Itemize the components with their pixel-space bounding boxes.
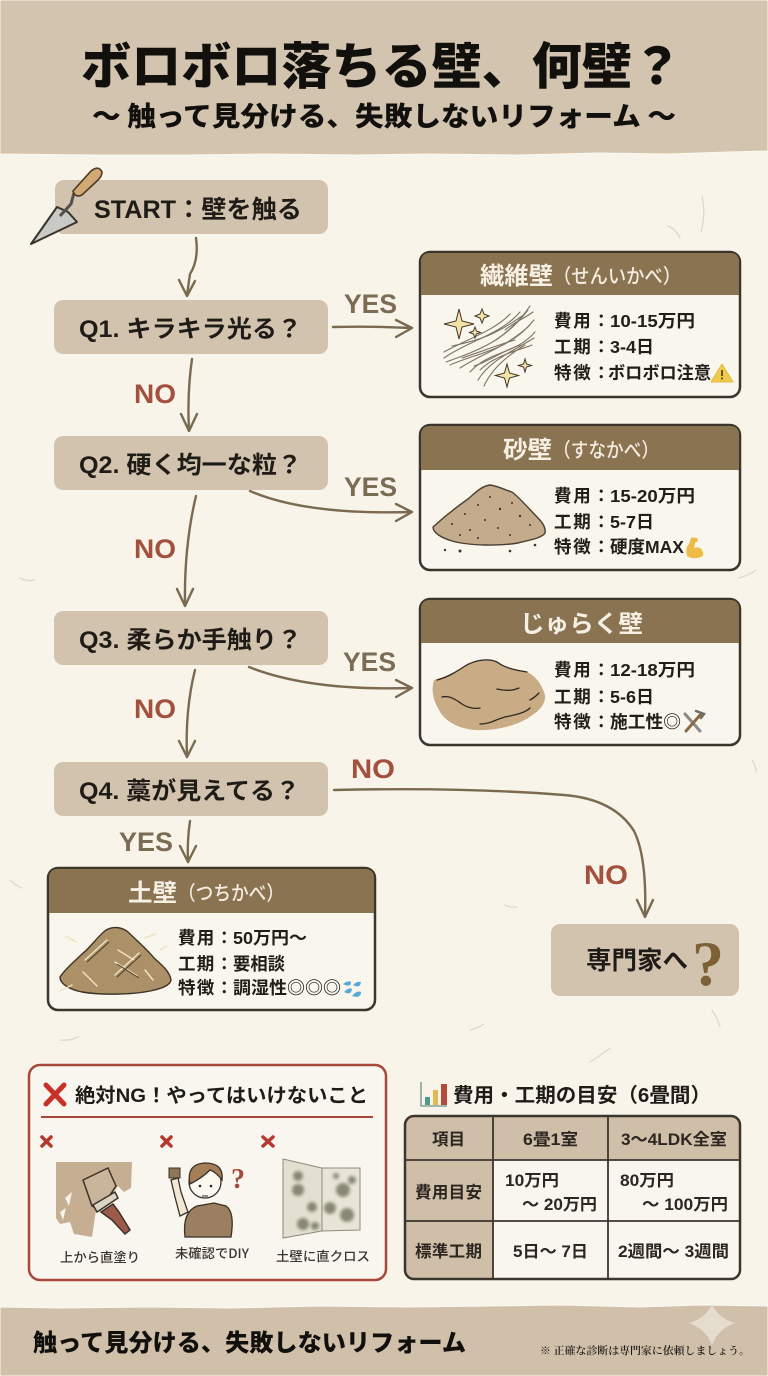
table row: cost: ～ 100万円 [642, 1196, 728, 1214]
label: no 5: NO [584, 860, 628, 890]
card: sand wall: （すなかべ） [553, 434, 659, 463]
specs: 工期： [554, 337, 610, 357]
specs: 工期： [554, 512, 610, 532]
item: cloth over earth wall: 土壁に直クロス [276, 1246, 370, 1265]
table row: duration: 2週間～ 3週間 [618, 1242, 729, 1261]
specs: 50万円～ [233, 928, 307, 948]
Q2 pill [54, 436, 328, 490]
table header row: 項目 [432, 1131, 465, 1149]
card: earth wall [48, 868, 375, 1010]
specs: 12-18万円 [610, 660, 695, 680]
Q4 pill [54, 762, 328, 816]
arrow: Q1 to Q2 [181, 359, 197, 431]
specs: 施工性◎ [610, 712, 681, 732]
specs: 要相談 [233, 954, 285, 974]
specs: 特徴： [554, 712, 610, 732]
arrow: Q2 to Q3 [177, 496, 196, 606]
label: no 4: NO [351, 754, 395, 784]
Q1 pill [54, 300, 328, 354]
card: sand wall: 砂壁 [503, 437, 552, 464]
footnote: ※ 正確な診断は専門家に依頼しましょう。 [540, 1343, 750, 1358]
label: no 1: NO [134, 379, 176, 409]
expert box [551, 924, 739, 999]
icon: sparkle [689, 1304, 735, 1345]
specs [554, 486, 695, 557]
icon: sand pile [433, 485, 545, 552]
arrow: Q3 to Q4 [179, 670, 195, 757]
specs: 特徴： [178, 978, 233, 998]
table row: cost [415, 1172, 728, 1214]
label: yes 2: YES [344, 472, 397, 502]
header band [0, 0, 768, 155]
specs: 特徴： [554, 363, 610, 383]
item: DIY without checking: ? [231, 1164, 245, 1195]
icon: straw mound [60, 928, 171, 994]
specs: 費用： [178, 928, 233, 948]
start pill [55, 180, 328, 234]
arrow: Q2 yes [250, 491, 412, 521]
Q4 pill: Q4. 藁が見えてる？ [79, 777, 300, 805]
Q3 pill [54, 611, 328, 665]
table header row: 3～4LDK全室 [621, 1129, 727, 1149]
label: no 3: NO [134, 694, 176, 724]
label: yes 3: YES [343, 647, 396, 677]
Q2 pill: Q2. 硬く均一な粒？ [79, 452, 302, 479]
icon: warning [711, 364, 733, 382]
card: juraku wall [420, 599, 740, 745]
table row: cost: 80万円 [620, 1172, 674, 1190]
specs: 5-6日 [610, 687, 654, 707]
icon: muscle [686, 538, 703, 558]
subtitle: ～ 触って見分ける、失敗しないリフォーム ～ [92, 95, 676, 134]
expert box: 専門家へ [586, 947, 688, 975]
specs: 調湿性◎◎◎ [233, 978, 341, 998]
footer band [0, 1304, 768, 1376]
icon: fibers and sparkles [444, 306, 535, 387]
icon: question mark: ? [692, 928, 724, 999]
table row: duration [415, 1241, 729, 1261]
specs: ボロボロ注意 [608, 363, 711, 383]
specs [554, 660, 695, 732]
Q1 pill: Q1. キラキラ光る？ [79, 316, 302, 343]
icon: plaster mound [433, 660, 545, 730]
arrow: Q3 yes [249, 667, 412, 697]
specs: 10-15万円 [610, 311, 695, 331]
table header row: 6畳1室 [523, 1130, 578, 1149]
specs: 5-7日 [610, 512, 654, 532]
card: juraku wall: じゅらく壁 [520, 611, 643, 638]
item: direct paint: 上から直塗り [60, 1247, 140, 1266]
item: DIY without checking: 未確認でDIY [175, 1243, 250, 1262]
arrow: Q4 to expert [334, 789, 653, 917]
specs: 3-4日 [610, 337, 654, 357]
table row: cost: 費用目安 [415, 1183, 482, 1202]
specs: 費用： [554, 311, 610, 331]
icon: trowel [31, 168, 102, 244]
arrow: Q4 to earth wall [180, 821, 196, 862]
panel heading: 絶対NG！やってはいけないこと [75, 1085, 368, 1107]
table row: duration: 5日～ 7日 [513, 1243, 588, 1261]
specs: 工期： [178, 954, 233, 974]
table row: duration: 標準工期 [415, 1241, 482, 1261]
icon: bar chart [421, 1082, 447, 1106]
card: fiber wall: 繊維壁 [480, 263, 553, 290]
card: fiber wall [420, 252, 740, 397]
card: earth wall: （つちかべ） [178, 877, 284, 906]
specs: 15-20万円 [610, 486, 695, 506]
label: yes 1: YES [344, 289, 397, 319]
label: no 2: NO [134, 534, 176, 564]
specs: 費用： [554, 660, 610, 680]
Q3 pill: Q3. 柔らか手触り？ [79, 627, 302, 654]
item: cloth over earth wall [263, 1137, 370, 1265]
table: cost and schedule [405, 1116, 740, 1279]
specs: 硬度MAX [610, 537, 684, 557]
item: DIY without checking [162, 1137, 250, 1262]
card: earth wall: 土壁 [128, 880, 177, 907]
table row: cost: 10万円 [505, 1172, 559, 1190]
label: yes 4: YES [119, 827, 173, 857]
table header row [432, 1129, 727, 1149]
footer tagline: 触って見分ける、失敗しないリフォーム [33, 1323, 466, 1358]
panel: absolutely NG [29, 1065, 386, 1280]
specs: 工期： [554, 687, 610, 707]
card: sand wall [420, 425, 740, 570]
table row: cost: ～ 20万円 [522, 1196, 597, 1214]
arrow: start to Q1 [179, 238, 197, 296]
arrow: Q1 yes [333, 320, 412, 337]
title: ボロボロ落ちる壁、何壁？ [81, 27, 682, 99]
panel: cost table heading: 費用・工期の目安（6畳間） [453, 1084, 711, 1107]
specs: 費用： [554, 486, 610, 506]
icon: tools [685, 711, 704, 731]
icon: large x [46, 1085, 64, 1104]
specs [178, 928, 341, 998]
start text: START：壁を触る [94, 196, 302, 224]
item: direct paint [42, 1137, 140, 1266]
card: fiber wall: （せんいかべ） [553, 260, 681, 289]
icon: drops [343, 981, 361, 997]
specs: 特徴： [554, 537, 610, 557]
specs [554, 311, 711, 383]
